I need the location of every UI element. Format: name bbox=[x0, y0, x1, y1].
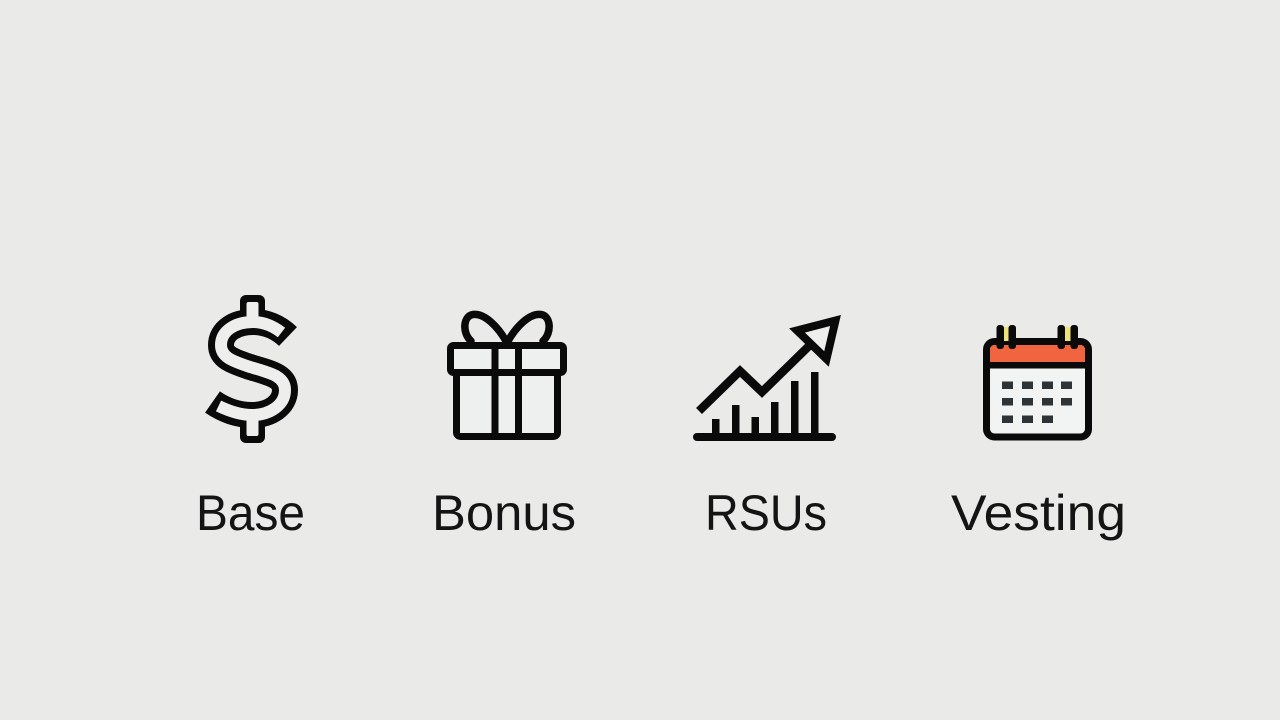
label: Base: Base bbox=[196, 485, 305, 541]
icon: gift box bbox=[450, 314, 564, 437]
label: Vesting: Vesting bbox=[951, 485, 1126, 541]
icon: dollar sign bbox=[212, 295, 288, 443]
icon: rising chart with arrow bbox=[693, 320, 836, 441]
icon: calendar bbox=[986, 325, 1089, 437]
label: Bonus: Bonus bbox=[432, 485, 576, 541]
label: RSUs: RSUs bbox=[705, 485, 827, 541]
